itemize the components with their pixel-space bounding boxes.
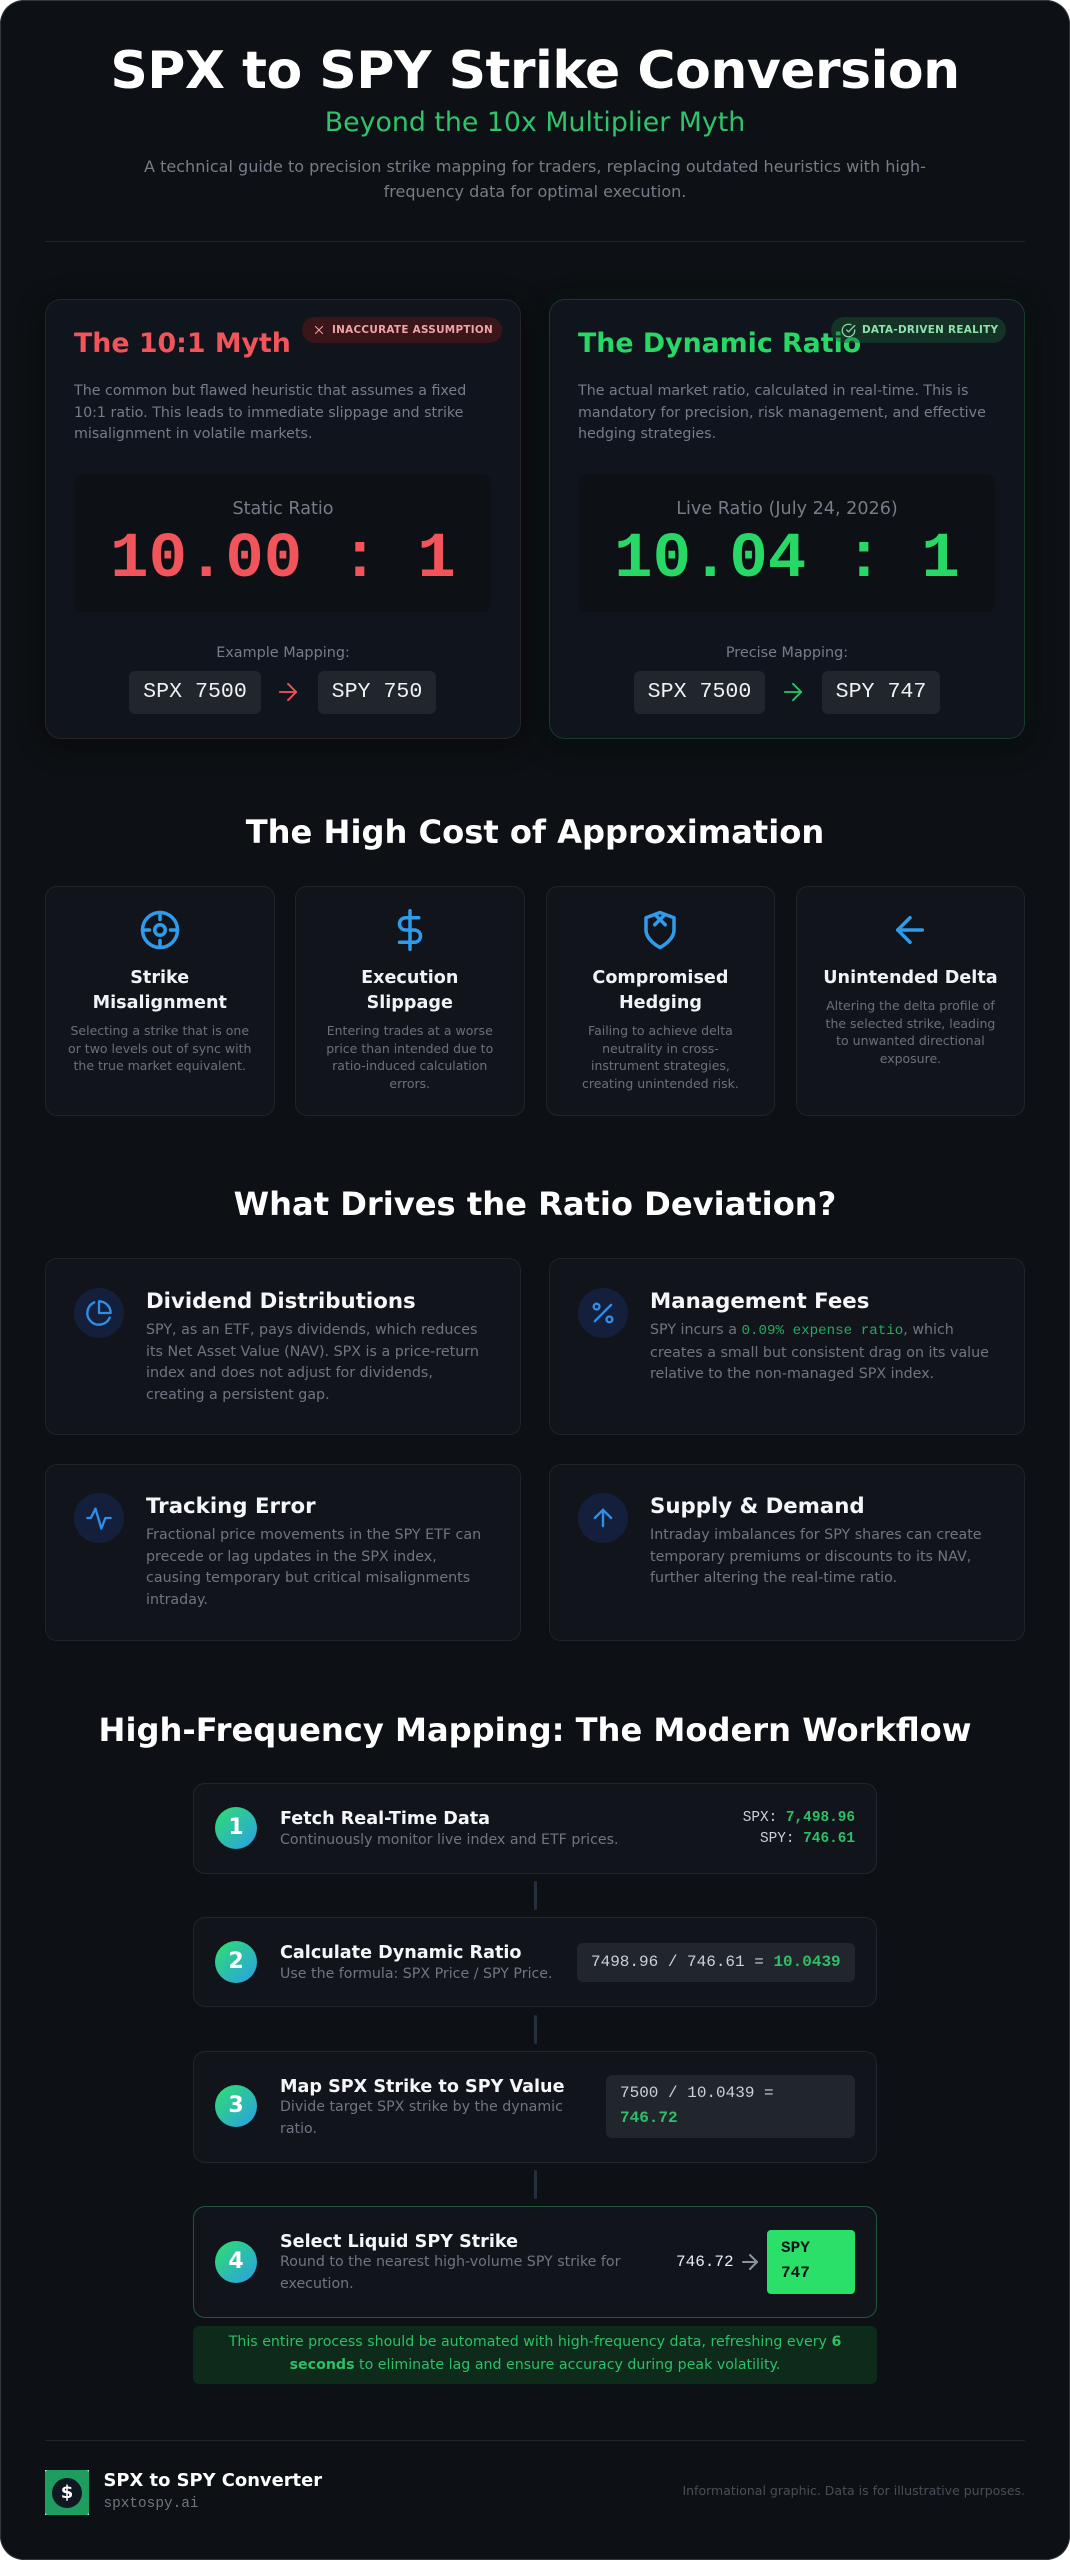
selected strike: 747: [781, 2264, 810, 2282]
callout: seconds to eliminate lag and ensure accuracy during peak volatility.: [290, 2357, 780, 2373]
mapping label: Example Mapping:: [216, 645, 350, 661]
card title: Supply & Demand: [650, 1494, 865, 1519]
card text: neutrality in cross-: [602, 1041, 719, 1056]
chip: SPX 7500: SPX 7500: [143, 680, 247, 704]
card: execution slippage: [295, 886, 524, 1116]
card text: Fractional price movements in the SPY ETF can: [146, 1527, 481, 1543]
card text: instrument strategies,: [591, 1058, 730, 1073]
card text: Intraday imbalances for SPY shares can create: [650, 1527, 982, 1543]
icon: percent: [578, 1288, 628, 1338]
step number: 4: [228, 2249, 244, 2274]
icon: dollar: [398, 909, 422, 951]
step number: 3: [228, 2093, 244, 2118]
card text: price than intended due to: [326, 1041, 493, 1056]
card text: temporary premiums or discounts to its NAV,: [650, 1549, 971, 1565]
badge: data-driven reality: [831, 317, 1006, 343]
description: misalignment in volatile markets.: [74, 426, 312, 442]
icon: pulse: [74, 1493, 124, 1543]
card text: or two levels out of sync with: [68, 1041, 251, 1056]
icon: check circle: [842, 324, 856, 338]
card title: Misalignment: [93, 993, 227, 1013]
step 1: [193, 1783, 877, 1874]
step text: [280, 2099, 563, 2137]
ratio value: 10.00 : 1: [110, 524, 456, 596]
description: The common but flawed heuristic that assumes a fixed: [74, 383, 466, 399]
card text: causing temporary but critical misalignments: [146, 1570, 470, 1586]
card text: creates a small but consistent drag on its value: [650, 1345, 989, 1361]
footer logo: $: [61, 2482, 73, 2502]
panel: the dynamic ratio: [549, 299, 1025, 739]
card title: [361, 968, 458, 1013]
chip: SPY 750: [318, 671, 436, 714]
card: unintended delta: [796, 886, 1025, 1116]
arrow: [278, 682, 298, 702]
card title: [592, 968, 728, 1013]
section heading: cost: The High Cost of Approximation: [246, 813, 824, 851]
selected strike: SPY: [781, 2239, 810, 2257]
unrounded value: 746.72: [676, 2253, 734, 2271]
description: The actual market ratio, calculated in real-time. This is: [578, 383, 968, 399]
footer brand name: SPX to SPY Converter: [104, 2470, 322, 2491]
card: dividend distributions: [45, 1258, 521, 1435]
panel heading: The 10:1 Myth: [74, 328, 291, 358]
card text: its Net Asset Value (NAV). SPX is a price-return: [146, 1344, 479, 1360]
section heading: workflow: High-Frequency Mapping: The Modern Workflow: [99, 1711, 971, 1749]
card text: creating a persistent gap.: [146, 1387, 330, 1403]
step 3: [193, 2051, 877, 2163]
card: strike misalignment: [45, 886, 274, 1116]
card text: [650, 1527, 982, 1586]
live ratio box: [579, 475, 995, 612]
selected strike: [767, 2230, 855, 2294]
intro text: frequency data for optimal execution.: [384, 182, 686, 201]
live prices: SPY: 746.61: [760, 1831, 855, 1847]
card: management fees: [549, 1258, 1025, 1435]
icon: cross: [314, 326, 323, 334]
card text: Failing to achieve delta: [588, 1023, 733, 1038]
intro text: A technical guide to precision strike mapping for traders, replacing outdated heuristics with high-: [144, 157, 926, 176]
card text: [146, 1527, 481, 1608]
card text: SPY incurs a 0.09% expense ratio, which: [650, 1322, 954, 1339]
card text: the selected strike, leading: [826, 1016, 995, 1031]
card text: creating unintended risk.: [582, 1076, 739, 1091]
card title: [93, 968, 227, 1013]
icon: shield with cross: [644, 910, 676, 950]
arrow: [742, 2254, 758, 2270]
footer logo: [45, 2470, 89, 2515]
formula: 746.72: [620, 2109, 678, 2127]
description: hedging strategies.: [578, 426, 716, 442]
badge: inaccurate assumption: [302, 317, 502, 343]
step title: Select Liquid SPY Strike: [280, 2232, 518, 2252]
card text: errors.: [389, 1076, 430, 1091]
chip: SPX 7500: [129, 671, 261, 714]
chip: SPY 750: SPY 750: [332, 680, 422, 704]
step title: Fetch Real-Time Data: [280, 1808, 490, 1828]
card title: Dividend Distributions: [146, 1289, 416, 1314]
step text: Divide target SPX strike by the dynamic: [280, 2099, 563, 2115]
callout: This entire process should be automated with high-frequency data, refreshing every 6: [229, 2334, 841, 2350]
card: tracking error: [45, 1464, 521, 1641]
step title: Calculate Dynamic Ratio: [280, 1942, 521, 1962]
step number: [215, 1941, 257, 1983]
card text: intraday.: [146, 1592, 208, 1608]
formula: [606, 2075, 855, 2138]
footer url: spxtospy.ai: [104, 2496, 198, 2512]
card: supply and demand: [549, 1464, 1025, 1641]
mapping label: Precise Mapping:: [726, 645, 848, 661]
card text: Entering trades at a worse: [327, 1023, 493, 1038]
step number: 2: [228, 1949, 244, 1974]
step text: Continuously monitor live index and ETF prices.: [280, 1832, 619, 1848]
ratio label: Live Ratio (July 24, 2026): [676, 499, 898, 519]
card text: SPY, as an ETF, pays dividends, which reduces: [146, 1322, 477, 1338]
card title: Unintended Delta: [823, 968, 998, 988]
step text: execution.: [280, 2276, 354, 2292]
card text: ratio-induced calculation: [332, 1058, 487, 1073]
card text: [826, 998, 995, 1066]
live prices: SPX: 7,498.96: [743, 1810, 855, 1826]
icon: pie chart: [74, 1288, 124, 1338]
step number: [215, 2085, 257, 2127]
panel heading: The Dynamic Ratio: [578, 328, 861, 358]
footer disclaimer: Informational graphic. Data is for illustrative purposes.: [682, 2483, 1025, 2498]
icon: up arrow: [578, 1493, 628, 1543]
card text: precede or lag updates in the SPX index,: [146, 1549, 437, 1565]
chip: SPX 7500: SPX 7500: [648, 680, 751, 704]
card text: Altering the delta profile of: [826, 998, 995, 1013]
card title: Management Fees: [650, 1289, 869, 1314]
step text: [280, 2254, 620, 2292]
description: 10:1 ratio. This leads to immediate slippage and strike: [74, 405, 463, 421]
ratio label: Static Ratio: [232, 499, 334, 519]
card: compromised hedging: [546, 886, 775, 1116]
live prices: [743, 1810, 855, 1847]
step 2: [193, 1917, 877, 2007]
static ratio box: [75, 475, 491, 612]
icon: left arrow: [896, 916, 924, 944]
card text: exposure.: [880, 1051, 941, 1066]
chip: SPY 747: [822, 671, 940, 714]
card title: Execution: [361, 968, 458, 988]
step text: Round to the nearest high-volume SPY strike for: [280, 2254, 620, 2270]
badge text: INACCURATE ASSUMPTION: [332, 324, 493, 336]
step number: [215, 2241, 257, 2283]
card title: Slippage: [367, 993, 453, 1013]
card text: [650, 1322, 989, 1382]
ratio value: 10.04 : 1: [614, 524, 960, 596]
section heading: drivers: What Drives the Ratio Deviation?: [234, 1185, 836, 1223]
formula: 7500 / 10.0439 =: [620, 2084, 774, 2102]
subtitle: Beyond the 10x Multiplier Myth: [325, 106, 745, 138]
panel: the 10:1 myth: [45, 299, 521, 739]
formula: 7498.96 / 746.61 = 10.0439: [591, 1953, 841, 1971]
card title: Tracking Error: [146, 1494, 316, 1519]
card text: Selecting a strike that is one: [70, 1023, 249, 1038]
card text: [582, 1023, 739, 1091]
badge text: DATA-DRIVEN REALITY: [862, 324, 998, 336]
description: mandatory for precision, risk management, and effective: [578, 405, 986, 421]
card title: Strike: [130, 968, 189, 988]
card text: [68, 1023, 251, 1073]
card text: [146, 1322, 479, 1403]
step number: 1: [228, 1815, 244, 1840]
callout: [193, 2326, 877, 2384]
step text: ratio.: [280, 2121, 317, 2137]
formula: [577, 1943, 855, 1982]
card text: the true market equivalent.: [74, 1058, 246, 1073]
card title: Hedging: [619, 993, 702, 1013]
arrow: [784, 682, 802, 702]
icon: crosshair: [140, 910, 180, 950]
card text: to unwanted directional: [836, 1033, 985, 1048]
card text: [326, 1023, 493, 1091]
card text: further altering the real-time ratio.: [650, 1570, 897, 1586]
step title: Map SPX Strike to SPY Value: [280, 2076, 564, 2096]
card text: index and does not adjust for dividends,: [146, 1365, 433, 1381]
description: [578, 383, 986, 442]
step text: Use the formula: SPX Price / SPY Price.: [280, 1966, 553, 1982]
intro text: [144, 157, 926, 201]
chip: SPY 747: SPY 747: [836, 680, 926, 704]
description: [74, 383, 466, 442]
step 4: [193, 2206, 877, 2318]
card text: relative to the non-managed SPX index.: [650, 1366, 934, 1382]
step number: [215, 1807, 257, 1849]
card title: Compromised: [592, 968, 728, 988]
title: SPX to SPY Strike Conversion: [110, 40, 960, 100]
chip: SPX 7500: [634, 671, 765, 714]
